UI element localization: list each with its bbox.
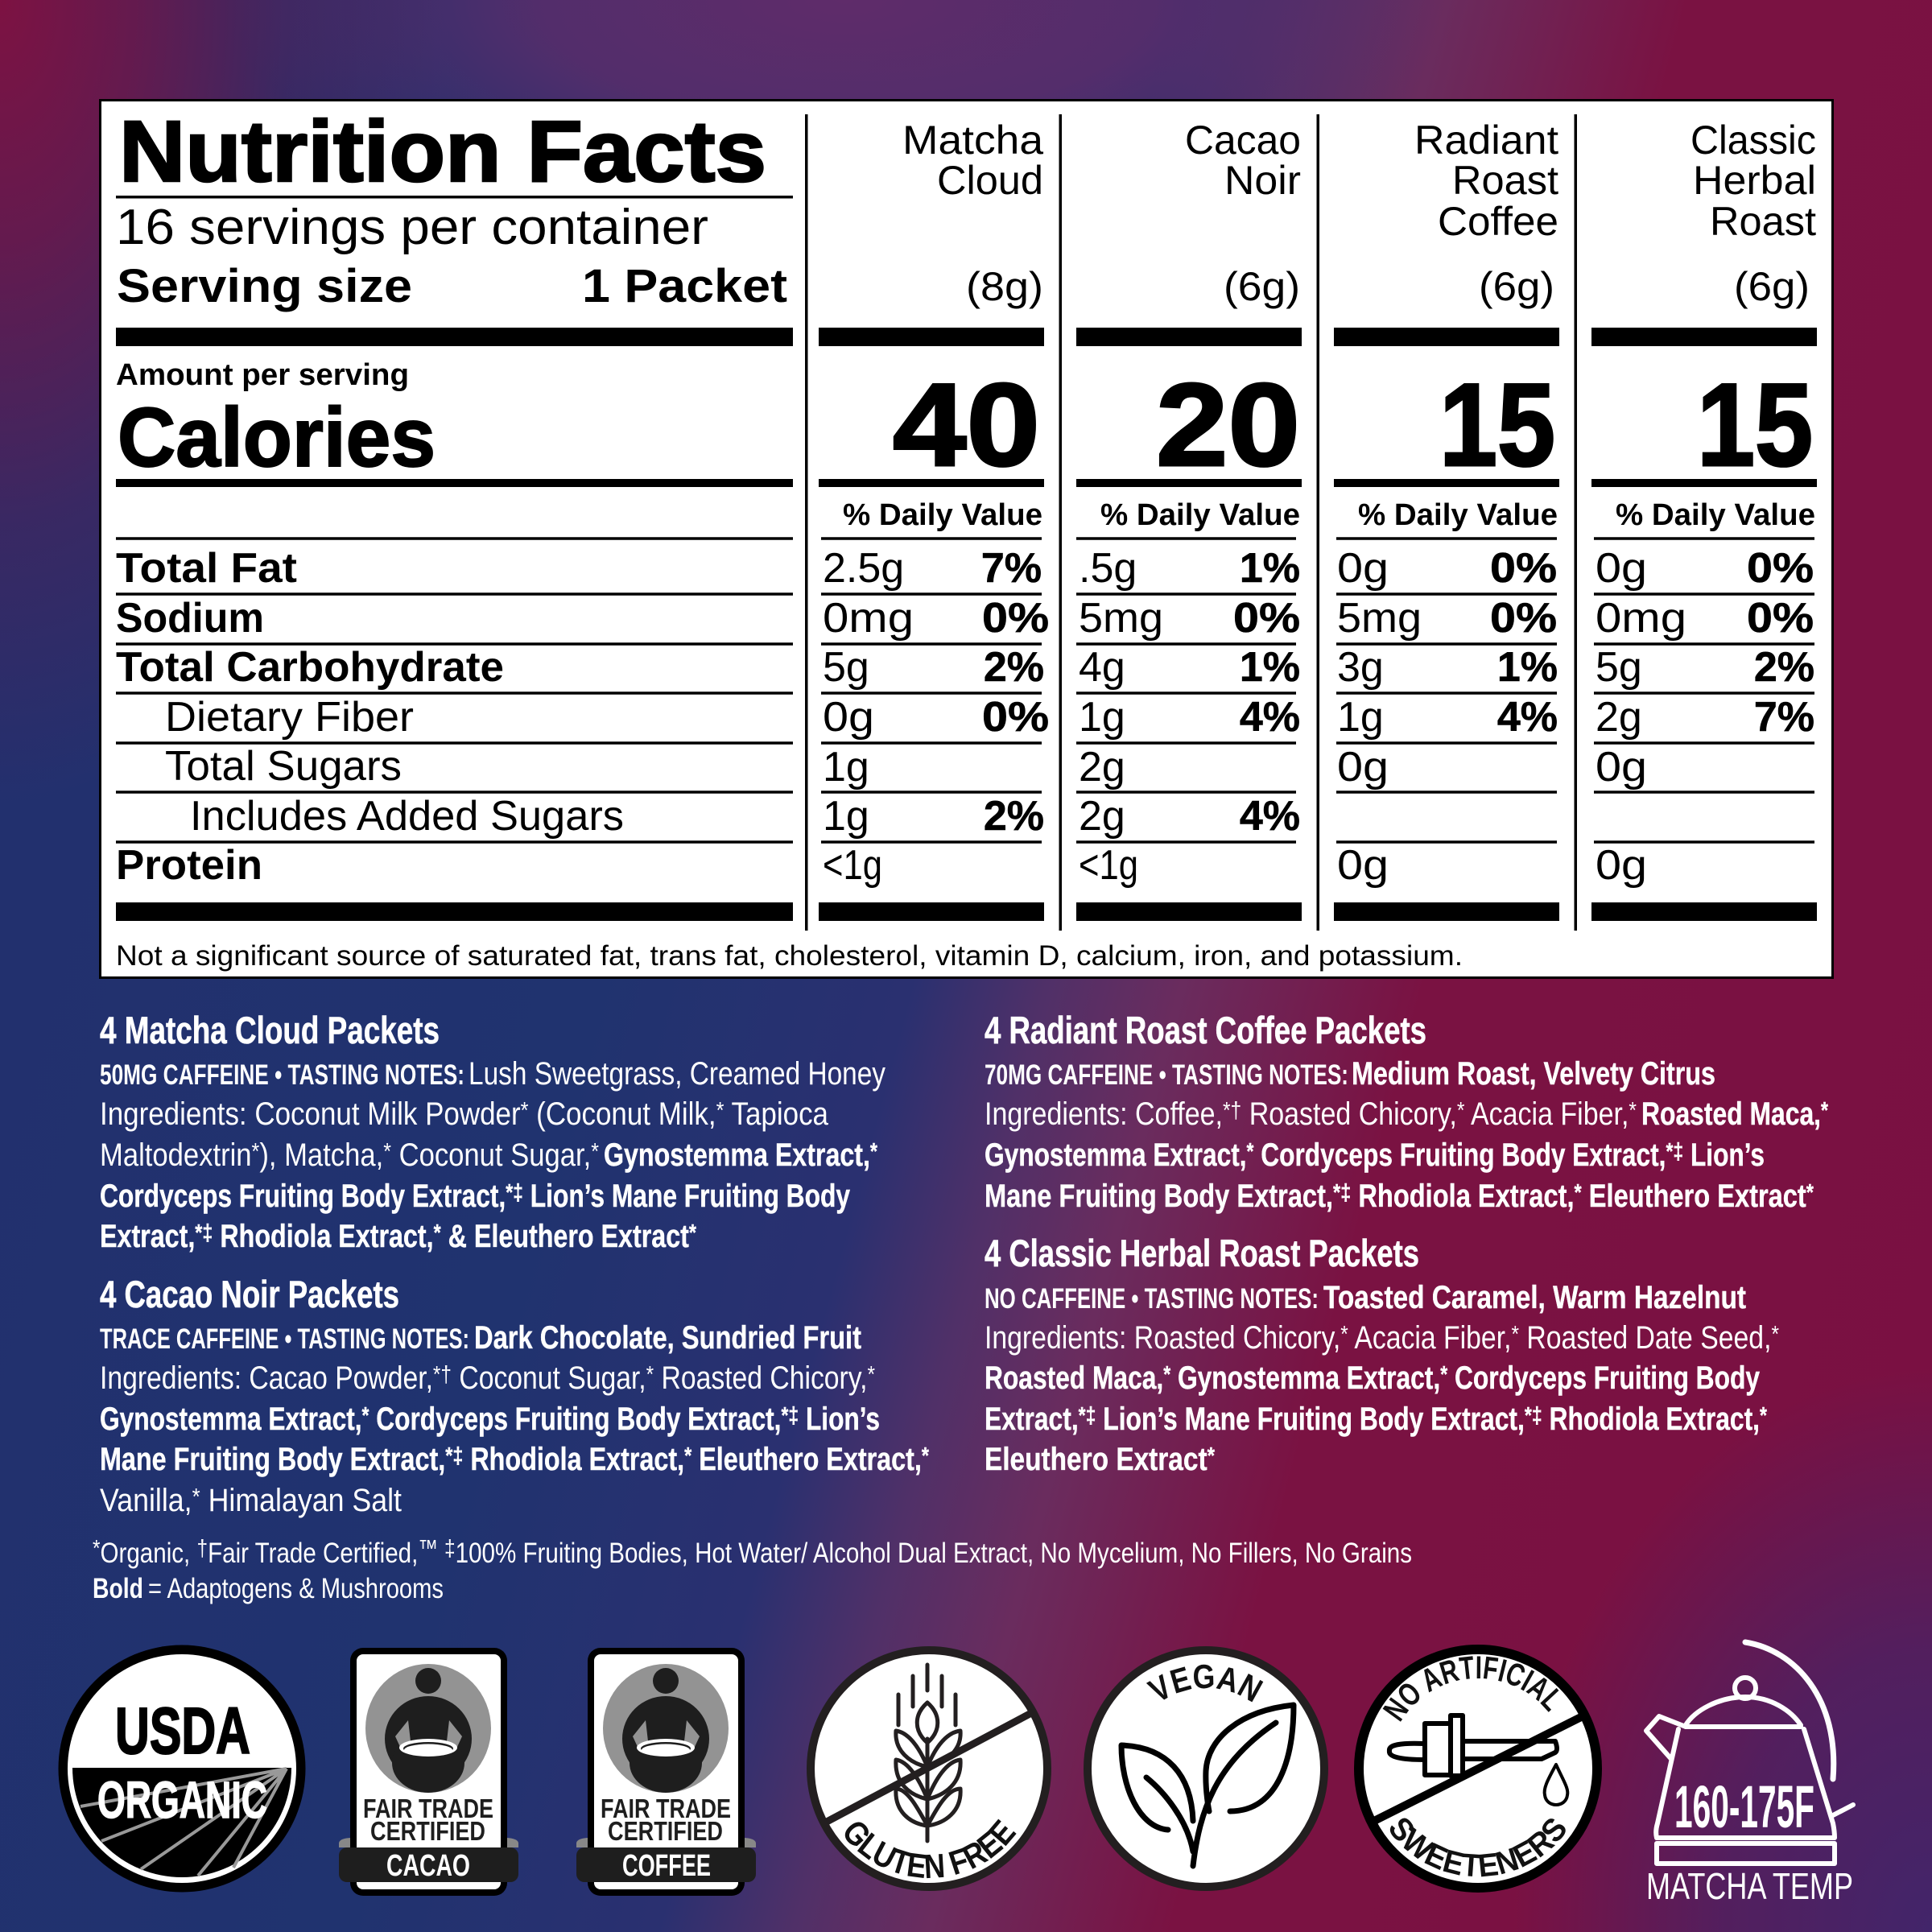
values: Matcha Cloud: 0%	[982, 694, 1049, 741]
column header: Radiant Roast Coffee: Radiant	[1414, 118, 1558, 163]
badge: Gluten Free	[807, 1646, 1051, 1891]
text block: Matcha Cloud packets: Lush Sweetgrass, Creamed Honey	[469, 1056, 886, 1092]
nutrient row labels: Total Carbohydrate	[116, 644, 504, 691]
values: Cacao Noir: 1%	[1240, 644, 1300, 691]
values: Matcha Cloud	[823, 545, 1049, 889]
text block: Radiant Roast Coffee packets: Gynostemma Extract,* Cordyceps Fruiting Body Extract,*‡ Lion’s	[985, 1137, 1765, 1173]
values: Radiant Roast Coffee: 0%	[1490, 595, 1557, 642]
text block: Classic Herbal Roast packets: Toasted Caramel, Warm Hazelnut	[1323, 1280, 1746, 1315]
badge: Fair Trade Certified Coffee: FAIR TRADE	[601, 1794, 731, 1823]
badge: USDA Organic	[58, 1645, 306, 1892]
nutrient row labels: Total Fat	[116, 545, 297, 592]
column header: Radiant Roast Coffee: Coffee	[1438, 199, 1558, 244]
column header: Matcha Cloud: Cloud	[937, 158, 1043, 203]
calories values: 40	[893, 359, 1040, 490]
values: Cacao Noir: 2g	[1079, 793, 1125, 840]
text block: Classic Herbal Roast packets: Ingredients: Roasted Chicory,* Acacia Fiber,* Roasted Date Seed,*	[985, 1320, 1779, 1356]
footnotes: *Organic, †Fair Trade Certified,™ ‡100% Fruiting Bodies, Hot Water/ Alcohol Dual Extract, No Mycelium, No Fillers, No Grains	[93, 1536, 1412, 1569]
text block: Matcha Cloud packets: Maltodextrin*), Matcha,* Coconut Sugar,*	[100, 1137, 599, 1173]
values: Matcha Cloud: 5g	[823, 644, 869, 691]
text block: Cacao Noir packets: Dark Chocolate, Sundried Fruit	[474, 1320, 861, 1356]
title: Nutrition Facts: Nutrition Facts	[119, 102, 766, 200]
values: Radiant Roast Coffee: 0%	[1490, 545, 1557, 592]
badge: Fair Trade Certified Coffee	[576, 1648, 756, 1896]
nutrient row labels: Sodium	[116, 595, 264, 642]
column header: Radiant Roast Coffee	[1414, 118, 1558, 309]
nutrient row labels	[116, 545, 624, 889]
percent daily value headers: % Daily Value	[1100, 498, 1300, 532]
values: Cacao Noir: 1%	[1240, 545, 1300, 592]
values: Radiant Roast Coffee	[1337, 545, 1558, 889]
nutrient row labels: Dietary Fiber	[165, 694, 414, 741]
values: Classic Herbal Roast: 0g	[1596, 842, 1647, 889]
values: Classic Herbal Roast	[1596, 545, 1814, 889]
text block: Matcha Cloud packets: Gynostemma Extract,*	[604, 1137, 878, 1173]
serving size	[117, 260, 787, 312]
values: Cacao Noir: 1g	[1079, 694, 1125, 741]
text block: Matcha Cloud packets: 50MG CAFFEINE • TASTING NOTES:	[100, 1059, 464, 1091]
text block: Matcha Cloud packets: Ingredients: Coconut Milk Powder* (Coconut Milk,* Tapioca	[100, 1096, 829, 1132]
values: Cacao Noir: 4%	[1240, 694, 1300, 741]
text block: Radiant Roast Coffee packets: 70MG CAFFEINE • TASTING NOTES:	[985, 1059, 1348, 1091]
calories values: 15	[1697, 359, 1813, 490]
values: Cacao Noir	[1079, 545, 1300, 889]
values: Classic Herbal Roast: 5g	[1596, 644, 1642, 691]
values: Radiant Roast Coffee: 0g	[1337, 545, 1389, 592]
panel: nutrition facts table	[100, 100, 1832, 977]
percent daily value headers: % Daily Value	[1358, 498, 1558, 532]
nutrient row labels: Includes Added Sugars	[190, 793, 624, 840]
values: Radiant Roast Coffee: 0g	[1337, 842, 1389, 889]
badge: Fair Trade Certified Cacao: CERTIFIED	[370, 1816, 485, 1846]
percent daily value headers: % Daily Value	[843, 498, 1042, 532]
values: Matcha Cloud: 0g	[823, 694, 874, 741]
badge: Fair Trade Certified Cacao: CACAO	[386, 1849, 470, 1883]
column header: Classic Herbal Roast: Herbal	[1693, 158, 1816, 203]
badge: No Artificial Sweeteners: NO ARTIFICIAL	[1383, 1656, 1558, 1722]
values: Cacao Noir: 4%	[1240, 793, 1300, 840]
badge: USDA Organic: ORGANIC	[97, 1771, 267, 1829]
values: Matcha Cloud: 1g	[823, 744, 869, 791]
text block: Classic Herbal Roast packets: Eleuthero Extract*	[985, 1442, 1216, 1477]
values: Cacao Noir: 2g	[1079, 744, 1125, 791]
text block: Cacao Noir packets	[100, 1273, 930, 1518]
column header: Radiant Roast Coffee: (6g)	[1479, 264, 1554, 309]
column header: Matcha Cloud: Matcha	[902, 118, 1043, 163]
values: Matcha Cloud: 7%	[981, 545, 1042, 592]
column header: Cacao Noir: Cacao	[1185, 118, 1301, 163]
text block: Radiant Roast Coffee packets	[985, 1009, 1829, 1214]
values: Classic Herbal Roast: 0%	[1747, 545, 1814, 592]
table footnote: Not a significant source of saturated fat, trans fat, cholesterol, vitamin D, calcium, iron, and potassium.	[116, 940, 1463, 972]
values: Classic Herbal Roast: 0%	[1747, 595, 1814, 642]
column header: Matcha Cloud	[902, 118, 1043, 309]
calories values	[893, 359, 1813, 490]
column header: Radiant Roast Coffee: Roast	[1452, 158, 1558, 203]
servings per container: 16 servings per container	[116, 200, 708, 255]
badge: Vegan: VEGAN	[1146, 1665, 1264, 1702]
calories label: Calories	[118, 391, 436, 485]
values: Matcha Cloud: 2%	[984, 644, 1044, 691]
calories values: 20	[1156, 359, 1300, 490]
text block: Radiant Roast Coffee packets: 4 Radiant Roast Coffee Packets	[985, 1009, 1426, 1051]
icon: kettle with matcha temperature: MATCHA TEMP	[1646, 1865, 1853, 1907]
column header: Cacao Noir	[1185, 118, 1301, 309]
values: Radiant Roast Coffee: 4%	[1497, 694, 1558, 741]
text block: Classic Herbal Roast packets: Extract,*‡ Lion’s Mane Fruiting Body Extract,*‡ Rhodiola Extract,*	[985, 1402, 1768, 1437]
values: Matcha Cloud: 1g	[823, 793, 869, 840]
footnotes	[93, 1536, 1412, 1604]
badge: No Artificial Sweeteners: SWEETENERS	[1389, 1818, 1566, 1877]
footnotes: = Adaptogens & Mushrooms	[148, 1573, 444, 1604]
values: Cacao Noir: 5mg	[1079, 595, 1163, 642]
icon: kettle with matcha temperature	[1646, 1642, 1853, 1907]
badge: Vegan	[1084, 1646, 1328, 1891]
values: Radiant Roast Coffee: 5mg	[1337, 595, 1422, 642]
text block: Classic Herbal Roast packets: NO CAFFEINE • TASTING NOTES:	[985, 1283, 1319, 1315]
text block: Radiant Roast Coffee packets: Medium Roast, Velvety Citrus	[1352, 1056, 1715, 1092]
text block: Matcha Cloud packets: 4 Matcha Cloud Packets	[100, 1009, 440, 1051]
text block: Classic Herbal Roast packets: 4 Classic Herbal Roast Packets	[985, 1232, 1419, 1274]
column header: Classic Herbal Roast: Roast	[1710, 199, 1816, 244]
values: Classic Herbal Roast: 7%	[1754, 694, 1814, 741]
values: Classic Herbal Roast: 0mg	[1596, 595, 1686, 642]
values: Classic Herbal Roast: 2g	[1596, 694, 1642, 741]
text block: Radiant Roast Coffee packets: Mane Fruiting Body Extract,*‡ Rhodiola Extract,* Eleuthero Extract*	[985, 1179, 1814, 1214]
values: Cacao Noir: 0%	[1233, 595, 1300, 642]
column header: Classic Herbal Roast: Classic	[1690, 118, 1816, 163]
values: Radiant Roast Coffee: 1g	[1337, 694, 1384, 741]
calories values: 15	[1439, 359, 1555, 490]
badge: Fair Trade Certified Coffee: CERTIFIED	[608, 1816, 723, 1846]
text block: Cacao Noir packets: Vanilla,* Himalayan Salt	[100, 1483, 402, 1518]
serving size: Serving size	[117, 260, 412, 312]
text block: Radiant Roast Coffee packets: Ingredients: Coffee,*† Roasted Chicory,* Acacia Fiber,*	[985, 1096, 1637, 1132]
icon: kettle with matcha temperature: 160-175F	[1674, 1773, 1814, 1840]
values: Radiant Roast Coffee: 1%	[1497, 644, 1558, 691]
text block: Cacao Noir packets: Mane Fruiting Body Extract,*‡ Rhodiola Extract,* Eleuthero Extract,*	[100, 1442, 930, 1477]
badge: Fair Trade Certified Coffee: COFFEE	[622, 1849, 711, 1883]
text block: Cacao Noir packets: Gynostemma Extract,* Cordyceps Fruiting Body Extract,*‡ Lion’s	[100, 1402, 880, 1437]
percent daily value headers: % Daily Value	[1616, 498, 1815, 532]
serving size: 1 Packet	[582, 260, 787, 312]
values: Cacao Noir: <1g	[1079, 842, 1138, 889]
text block: Radiant Roast Coffee packets: Roasted Maca,*	[1641, 1096, 1829, 1132]
column header: Cacao Noir: (6g)	[1224, 264, 1300, 309]
values: Cacao Noir: .5g	[1079, 545, 1137, 592]
column header: Classic Herbal Roast	[1690, 118, 1816, 309]
text block: Matcha Cloud packets	[100, 1009, 886, 1254]
text block: Cacao Noir packets: 4 Cacao Noir Packets	[100, 1273, 399, 1315]
text block: Matcha Cloud packets: Extract,*‡ Rhodiola Extract,* & Eleuthero Extract*	[100, 1219, 697, 1254]
footnotes: Bold	[93, 1573, 143, 1604]
percent daily value headers	[843, 498, 1815, 532]
values: Matcha Cloud: 0%	[982, 595, 1049, 642]
values: Radiant Roast Coffee: 0g	[1337, 744, 1389, 791]
values: Matcha Cloud: <1g	[823, 842, 882, 889]
values: Classic Herbal Roast: 0g	[1596, 744, 1647, 791]
column header: Cacao Noir: Noir	[1224, 158, 1301, 203]
nutrient row labels: Total Sugars	[165, 743, 402, 790]
amount per serving: Amount per serving	[116, 358, 409, 392]
badge: No Artificial Sweeteners	[1354, 1645, 1602, 1893]
values: Matcha Cloud: 0mg	[823, 595, 914, 642]
column header: Matcha Cloud: (8g)	[966, 264, 1043, 309]
values: Matcha Cloud: 2%	[984, 793, 1044, 840]
text block: Classic Herbal Roast packets: Roasted Maca,* Gynostemma Extract,* Cordyceps Fruiting Body	[985, 1360, 1761, 1396]
values: Cacao Noir: 4g	[1079, 644, 1125, 691]
text block: Cacao Noir packets: Ingredients: Cacao Powder,*† Coconut Sugar,* Roasted Chicory,*	[100, 1360, 875, 1396]
badge: USDA Organic: USDA	[115, 1695, 250, 1768]
badge: Fair Trade Certified Cacao	[339, 1648, 518, 1896]
values: Radiant Roast Coffee: 3g	[1337, 644, 1384, 691]
values: Matcha Cloud: 2.5g	[823, 545, 904, 592]
text block: Cacao Noir packets: TRACE CAFFEINE • TASTING NOTES:	[100, 1323, 469, 1355]
text block: Classic Herbal Roast packets	[985, 1232, 1779, 1477]
nutrient row labels: Protein	[116, 842, 262, 889]
text block: Matcha Cloud packets: Cordyceps Fruiting Body Extract,*‡ Lion’s Mane Fruiting Body	[100, 1179, 851, 1214]
badge: Gluten Free: GLUTEN FREE	[845, 1819, 1017, 1879]
values: Classic Herbal Roast: 0g	[1596, 545, 1647, 592]
column header: Classic Herbal Roast: (6g)	[1734, 264, 1810, 309]
badge: Fair Trade Certified Cacao: FAIR TRADE	[363, 1794, 493, 1823]
values: Classic Herbal Roast: 2%	[1754, 644, 1814, 691]
